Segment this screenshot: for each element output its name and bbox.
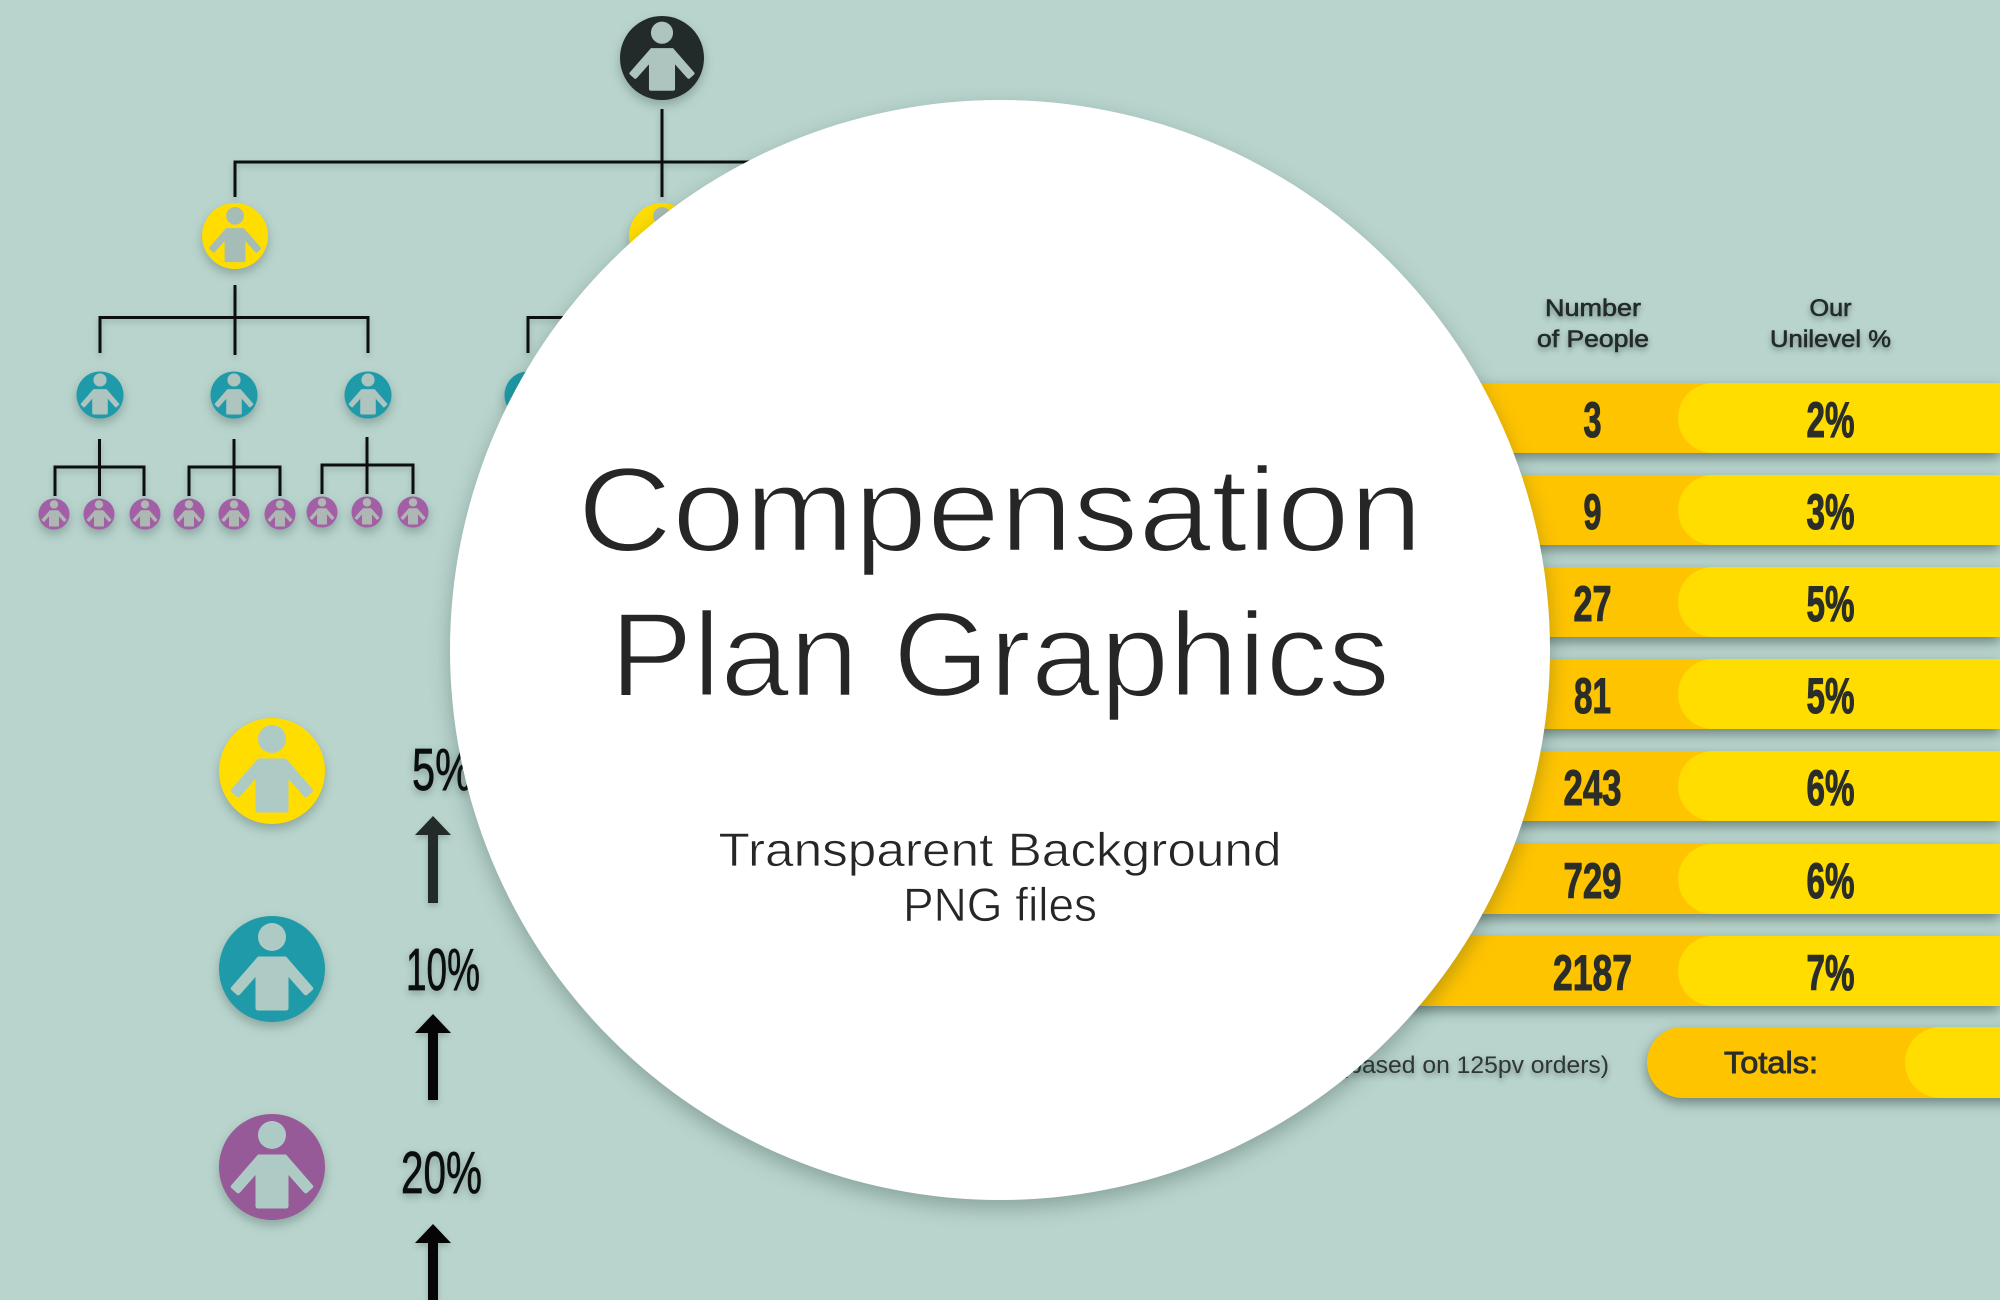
row 6 [1300, 844, 2000, 914]
icon: teal person large [219, 916, 325, 1022]
column heading: our unilevel: Unilevel % [1770, 326, 1891, 353]
label: 5%: 5% [412, 737, 472, 803]
icon: purple people level [38, 496, 428, 530]
org tree diagram [38, 16, 860, 530]
icon: yellow people level [202, 203, 695, 269]
row 2 [1300, 475, 2000, 545]
table rows [1300, 383, 2000, 1006]
row 3: 5% [1806, 576, 1854, 632]
row 7: 7% [1806, 945, 1854, 1001]
icon: top person [620, 16, 704, 100]
row 1: 2% [1806, 392, 1854, 448]
row 2: 9 [1584, 484, 1602, 540]
row 4: 5% [1806, 668, 1854, 724]
row 7: 2187 [1553, 945, 1632, 1001]
column heading: number of people: Number [1545, 295, 1641, 322]
row 4 [1300, 659, 2000, 729]
label: 20%: 20% [401, 1140, 482, 1206]
column heading: number of people: of People [1537, 326, 1649, 353]
row 1 [1300, 383, 2000, 453]
row 7 [1300, 936, 2000, 1006]
arrow: up black [415, 1014, 451, 1100]
row 5 [1300, 751, 2000, 821]
row 5: 6% [1806, 760, 1854, 816]
row 4: 81 [1574, 668, 1611, 724]
note: based on 125pv orders: (based on 125pv orders) [1340, 1052, 1609, 1079]
percentage legend [219, 718, 482, 1300]
icon: purple person large [219, 1114, 325, 1220]
arrow: up black cut off [415, 1224, 451, 1300]
column heading: number of people [1537, 295, 1649, 353]
row 3 [1300, 567, 2000, 637]
title [578, 443, 1422, 722]
row 5: 243 [1564, 760, 1622, 816]
title: Plan Graphics [610, 588, 1390, 722]
row 6: 6% [1806, 853, 1854, 909]
subtitle: PNG files [903, 878, 1097, 931]
column heading: our unilevel: Our [1810, 295, 1852, 322]
subtitle [718, 823, 1282, 931]
totals bar [1647, 1027, 2000, 1098]
table: unilevel plan [1300, 295, 2000, 1098]
tree connector lines [55, 109, 860, 496]
central white circle [450, 100, 1550, 1200]
title: Compensation [578, 443, 1422, 577]
icon: teal people level [76, 372, 552, 418]
icon: yellow person large [219, 718, 325, 824]
totals bar: Totals: [1724, 1045, 1818, 1080]
row 2: 3% [1806, 484, 1854, 540]
row 1: 3 [1584, 392, 1602, 448]
arrow: up dark [415, 816, 451, 903]
row 6: 729 [1564, 853, 1622, 909]
column heading: our unilevel [1770, 295, 1891, 353]
subtitle: Transparent Background [718, 823, 1282, 876]
row 3: 27 [1574, 576, 1612, 632]
label: 10%: 10% [406, 937, 480, 1003]
